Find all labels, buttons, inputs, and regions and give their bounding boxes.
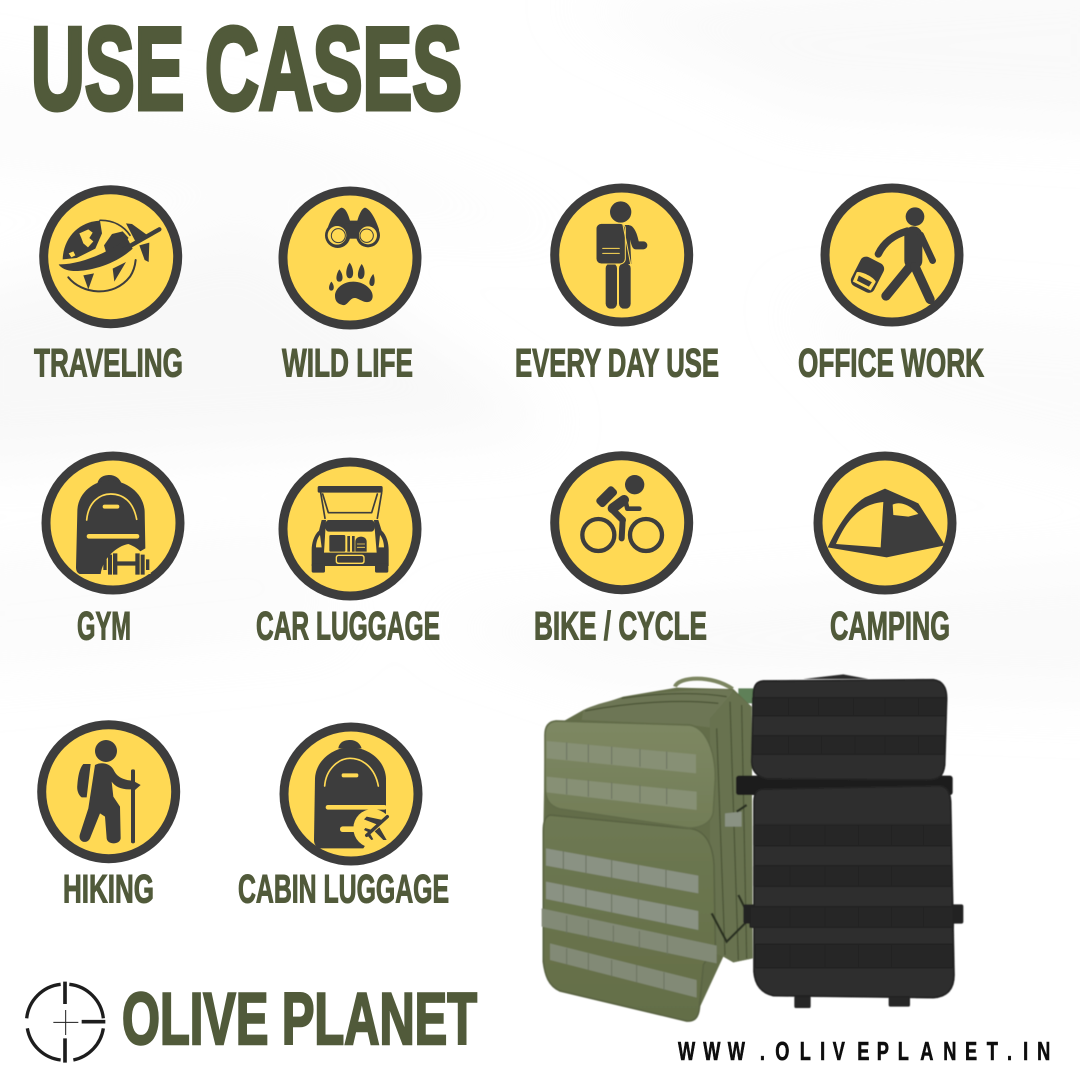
label: EVERY DAY USE	[515, 342, 719, 386]
olive backpack	[542, 679, 757, 1021]
icon: backpack with plane	[284, 727, 418, 861]
panel: bike / cycle	[534, 456, 707, 648]
logo: crosshair mark	[27, 982, 105, 1063]
panel: wild life	[282, 191, 417, 386]
panel: cabin luggage	[238, 727, 449, 912]
icon: person with backpack	[555, 188, 689, 322]
icon: person carrying bag	[825, 188, 959, 322]
panel: traveling	[34, 190, 183, 386]
panel: gym	[46, 456, 180, 648]
logo: brand name: OLIVE PLANET	[122, 979, 477, 1060]
icon: hiker	[42, 725, 176, 859]
label: WILD LIFE	[282, 342, 413, 386]
label: CAR LUGGAGE	[256, 604, 440, 648]
label: OFFICE WORK	[798, 342, 984, 386]
label: HIKING	[63, 868, 154, 912]
title: USE CASES	[31, 3, 462, 134]
label: GYM	[77, 604, 131, 648]
icon: globe and plane	[44, 190, 178, 324]
icon: binoculars and paw	[283, 191, 417, 325]
backpacks photo illustration	[542, 674, 963, 1021]
panel: every day use	[515, 188, 719, 386]
panel: car luggage	[256, 462, 440, 648]
label: CAMPING	[830, 604, 950, 648]
black backpack	[736, 674, 963, 1007]
panel: hiking	[42, 725, 176, 912]
label: BIKE / CYCLE	[534, 604, 707, 648]
icon: tent	[818, 456, 952, 590]
label: TRAVELING	[34, 342, 183, 386]
panel: office work	[798, 188, 984, 386]
label: CABIN LUGGAGE	[238, 868, 449, 912]
icon: cyclist	[555, 456, 689, 590]
icon: backpack with dumbbell	[46, 456, 180, 590]
icon: car boot with luggage	[283, 462, 417, 596]
panel: camping	[818, 456, 952, 648]
website url: WWW.OLIVEPLANET.IN	[678, 1037, 1050, 1066]
